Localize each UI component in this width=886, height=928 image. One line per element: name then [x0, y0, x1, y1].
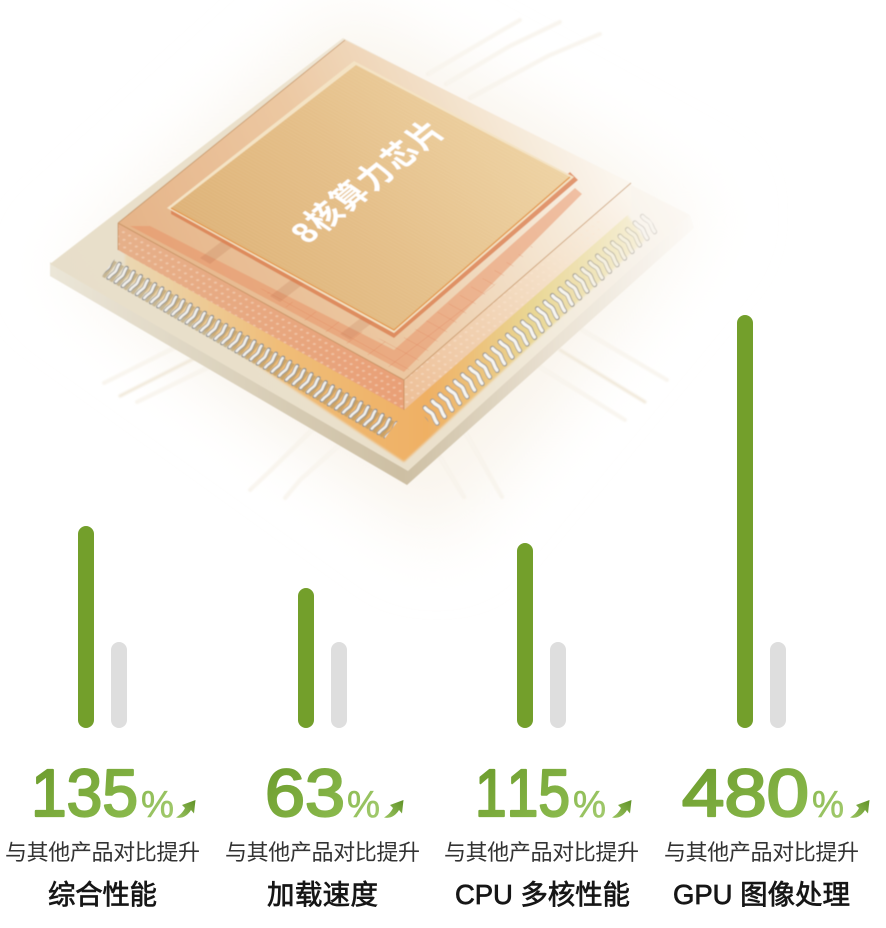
die face [171, 65, 570, 330]
chip illustration [50, 38, 694, 485]
block edge lines [118, 40, 631, 410]
die shadow edge [171, 172, 578, 338]
right side dots [404, 210, 600, 410]
circuit grid [260, 240, 540, 375]
value 480%: 480 [682, 756, 809, 831]
bars [78, 526, 127, 728]
value 115%: % [573, 784, 606, 826]
substrate side [50, 215, 694, 485]
caption: 与其他产品对比提升 [664, 840, 859, 865]
group 4: GPU 图像处理 [664, 315, 870, 910]
group 1: 综合性能 [5, 526, 200, 910]
left pin row [101, 258, 398, 440]
red interior below die [130, 188, 582, 372]
value 480%: % [812, 784, 844, 826]
group 2: 加载速度 [225, 588, 420, 910]
translucent block top [118, 40, 631, 380]
bars [737, 315, 786, 728]
caption: 与其他产品对比提升 [225, 840, 420, 865]
value 115%: 115 [475, 756, 570, 831]
translucent block left side [118, 223, 404, 410]
circuit traces around chip [104, 20, 667, 498]
metric name: CPU 多核性能 [455, 879, 630, 910]
interior darker bands [200, 238, 376, 340]
caption: 与其他产品对比提升 [444, 840, 639, 865]
die bottom edge [171, 177, 570, 330]
group 3: CPU 多核性能 [444, 543, 639, 910]
translucent block right side [404, 183, 631, 410]
value 135%: 135 [31, 756, 138, 831]
bars [298, 588, 347, 728]
value 63%: 63 [265, 756, 345, 831]
chip label: 8核算力芯片 [283, 115, 453, 249]
bars [517, 543, 566, 728]
right pin row [418, 211, 660, 430]
value 480% [682, 756, 870, 831]
caption: 与其他产品对比提升 [5, 840, 200, 865]
orange inner strip [125, 205, 645, 462]
value 135% [31, 756, 196, 831]
die brushed texture [171, 65, 570, 330]
value 63% [265, 756, 404, 831]
die outer frame [167, 61, 574, 333]
left side dots [118, 223, 404, 410]
metric name: 综合性能 [48, 879, 157, 910]
metric name: 加载速度 [267, 879, 378, 910]
value 135%: % [141, 784, 174, 826]
substrate top [50, 38, 690, 471]
metric name: GPU 图像处理 [673, 879, 850, 910]
background glow behind chip [50, 5, 720, 550]
value 63%: % [347, 784, 380, 826]
